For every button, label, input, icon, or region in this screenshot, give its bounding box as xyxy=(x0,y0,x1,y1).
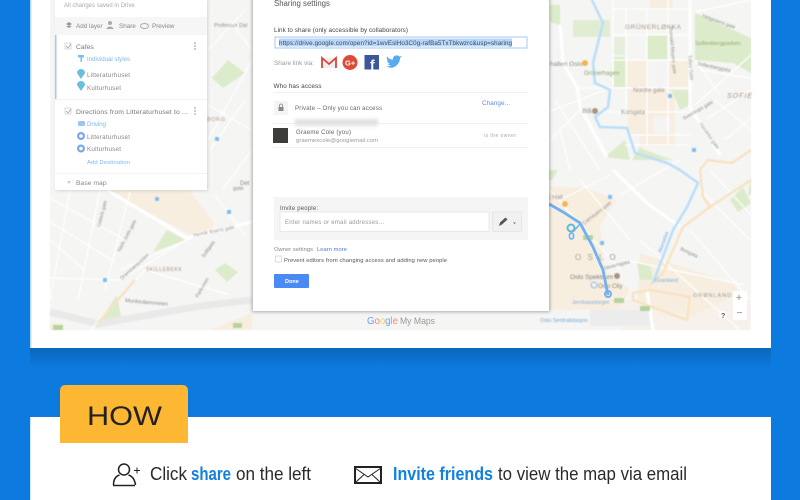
invite people box: Enter names or email addresses... xyxy=(285,220,384,226)
sidebar toolbar xyxy=(55,17,207,35)
layer: directions xyxy=(65,107,196,166)
owner settings xyxy=(274,247,447,264)
map arterial roads xyxy=(98,150,751,323)
map labels: hallen Oslo xyxy=(550,61,583,68)
map labels: Grønland xyxy=(655,278,678,284)
map labels: Jernbanetorget xyxy=(572,300,609,306)
icon: add person xyxy=(113,464,140,486)
icon: gmail xyxy=(322,58,336,68)
who has access heading: Who has access xyxy=(274,83,322,90)
map labels: Breigata xyxy=(679,246,699,260)
map beige districts xyxy=(50,0,750,330)
owner settings: Learn more xyxy=(317,247,347,253)
done button xyxy=(274,274,309,288)
map transit markers xyxy=(103,94,696,282)
base map row: Base map xyxy=(76,180,107,187)
map labels: Det xyxy=(240,181,250,187)
map main roads xyxy=(107,0,720,330)
map labels: Oslo Sentralstasjon xyxy=(540,318,588,324)
map railway xyxy=(50,300,252,324)
map place markers xyxy=(562,60,620,288)
invite people box: Invite people: xyxy=(280,206,318,212)
map zoom controls xyxy=(719,291,747,320)
HOW tab xyxy=(60,385,188,443)
map labels xyxy=(96,13,753,324)
map screenshot xyxy=(50,0,753,330)
map labels: GRÜNERLØKKA xyxy=(625,23,682,31)
map roads xyxy=(50,0,751,330)
map labels: Akerselva xyxy=(657,231,670,254)
map labels: Sofienberggata xyxy=(697,61,731,74)
map labels: Sverdrups gate xyxy=(682,99,715,122)
step text: click share xyxy=(150,464,311,484)
sidebar toolbar: Share xyxy=(119,23,136,30)
layer: directions: Litteraturhuset xyxy=(87,134,130,141)
sidebar toolbar: Preview xyxy=(152,23,175,30)
link to share field: Link to share (only accessible by collaborators) xyxy=(274,27,408,34)
map labels: Solligata xyxy=(201,240,217,259)
icon: google plus: G+ xyxy=(345,58,356,68)
map labels: Calmeyers gate xyxy=(582,200,613,227)
map labels: Grünerhagen xyxy=(584,71,619,77)
access row: owner xyxy=(273,128,516,144)
map labels: Helgesens gate xyxy=(701,13,736,31)
step text: invite friends xyxy=(393,464,687,484)
map labels: Blå xyxy=(582,107,592,115)
map labels: Korsgata xyxy=(621,110,646,116)
access row: private: Change... xyxy=(482,100,510,107)
layer: cafes: Litteraturhuset xyxy=(87,72,130,79)
owner settings: Owner settings xyxy=(274,247,313,253)
map labels: Nordre gate xyxy=(633,88,665,94)
map zoom controls: ? xyxy=(721,313,725,320)
route on map xyxy=(549,204,611,297)
HOW tab: HOW xyxy=(87,401,162,431)
map labels: SOFIE xyxy=(727,93,753,100)
layer: cafes: Cafes xyxy=(76,44,94,51)
link to share field: https://drive.google.com/open?id=1wvEslHo3C0g-rafBa5TxTbkwzrc&usp=sharing xyxy=(279,40,513,47)
map labels: Parkveien xyxy=(195,277,211,299)
icon: facebook: f xyxy=(370,56,375,72)
layer: directions: Directions from Litteraturhuset to ... xyxy=(76,109,188,116)
share link via icons xyxy=(274,55,402,72)
sidebar panel: All changes saved in Drive xyxy=(64,3,135,9)
map labels: BORG xyxy=(207,117,226,123)
step text: invite friends: to view the map via email xyxy=(498,464,687,484)
invite people box xyxy=(274,197,528,240)
map road badges xyxy=(53,235,650,330)
layer: directions: Kulturhuset xyxy=(87,146,121,153)
map labels: Niels Juels gate xyxy=(116,219,138,253)
step: click share xyxy=(113,464,311,486)
map labels: gate xyxy=(233,186,244,192)
map labels: Toftes Gate xyxy=(686,55,694,81)
access row: owner: Graeme Cole (you) xyxy=(296,129,351,136)
sidebar panel xyxy=(55,0,208,191)
bottom white panel xyxy=(30,417,771,500)
step text: click share: share xyxy=(191,464,231,484)
map labels: usic Hall xyxy=(540,195,563,201)
access row: owner: graemexcole@googlemail.com xyxy=(296,138,378,144)
sharing settings dialog xyxy=(252,0,550,312)
layer: cafes xyxy=(55,35,196,99)
layer: directions: Add Destination xyxy=(87,160,130,166)
icon: envelope xyxy=(355,467,381,483)
owner settings: Prevent editors from changing access and adding new people xyxy=(284,258,447,264)
panel shadow xyxy=(30,348,771,367)
done button: Done xyxy=(285,279,299,285)
map labels: Thorvald Meyers gate xyxy=(667,26,677,75)
step text: invite friends: Invite friends xyxy=(393,464,493,484)
map zoom controls: + xyxy=(736,293,742,304)
access row: owner: is the owner xyxy=(484,133,516,139)
google my maps logo: Google xyxy=(367,316,398,327)
map labels: Munkedamsveien xyxy=(125,298,168,308)
access row: private: Private – Only you can access xyxy=(295,105,382,112)
map labels: Stenersgata xyxy=(603,259,631,272)
access row: private xyxy=(274,100,510,115)
map river xyxy=(592,0,698,283)
link to share field xyxy=(274,27,527,48)
top white panel xyxy=(30,0,771,348)
share link via icons: Share link via: xyxy=(274,60,314,67)
map labels: Professor Dal xyxy=(214,23,247,29)
map labels: Gabels gate xyxy=(96,200,109,228)
map grey blocks xyxy=(653,63,670,133)
map labels: Oslo City xyxy=(598,284,622,290)
map labels: O S L O xyxy=(575,253,618,262)
map labels: SKILLEBEKK xyxy=(146,267,182,273)
google my maps logo: My Maps xyxy=(400,316,436,326)
layer: directions: Driving xyxy=(87,121,107,128)
map labels: Sofienbergparken xyxy=(695,41,741,47)
step: invite friends xyxy=(355,464,687,484)
sidebar toolbar: Add layer xyxy=(76,23,103,30)
map labels: Herslebs gate xyxy=(697,122,720,151)
map labels: Drammensveien xyxy=(119,253,151,281)
layer: cafes: Individual styles xyxy=(87,56,130,63)
icon: twitter xyxy=(386,55,402,68)
map labels: Oslo Spektrum xyxy=(570,274,613,281)
panel edge tint xyxy=(30,417,31,500)
map zoom controls: − xyxy=(736,308,742,319)
step text: click share: Click xyxy=(150,464,188,484)
map labels: Henrik Ibsens gate xyxy=(193,224,235,239)
map parks xyxy=(98,5,751,323)
panel edge tint xyxy=(30,0,32,348)
layer: cafes: Kulturhuset xyxy=(87,85,121,92)
google my maps logo xyxy=(367,316,436,327)
map labels: GRØNLAND xyxy=(693,293,732,299)
step text: click share: on the left xyxy=(236,464,311,484)
